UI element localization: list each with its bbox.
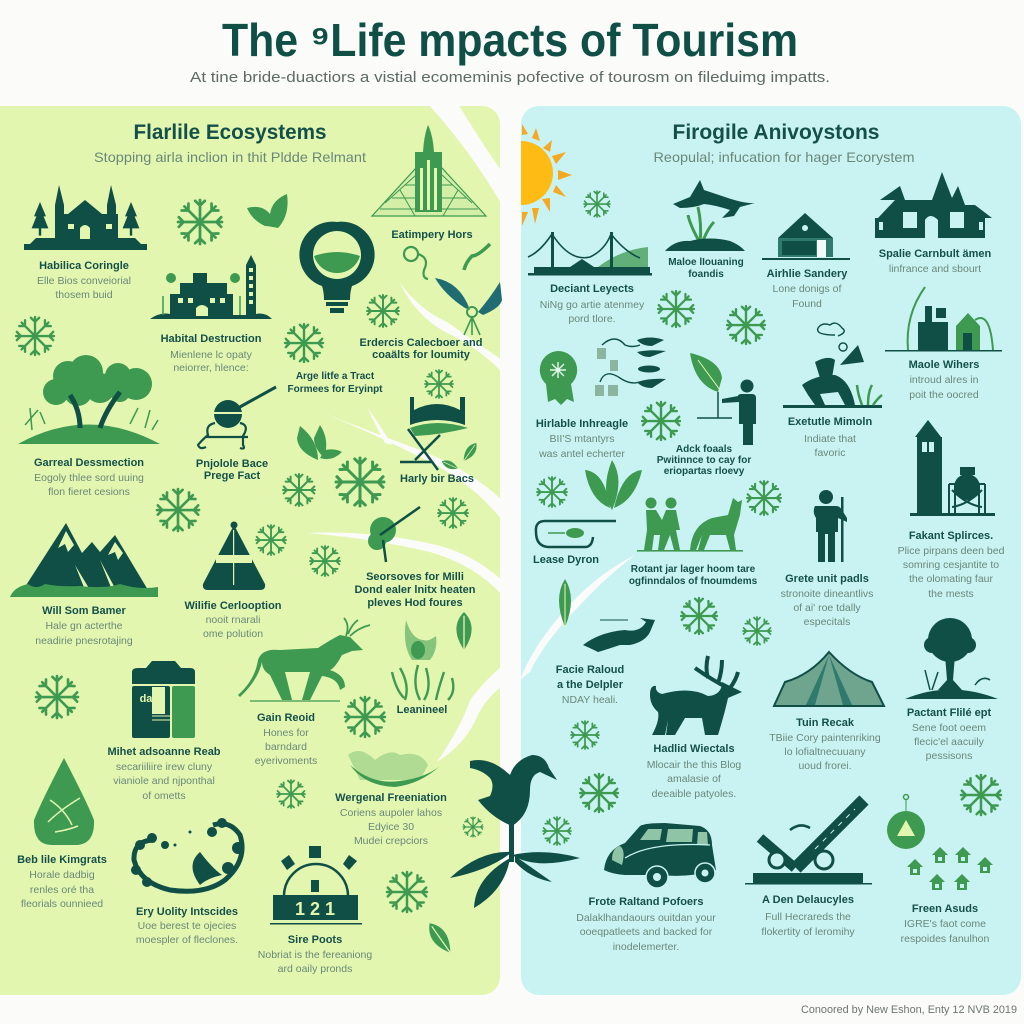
- icon: dome counter: 1 2 1: [295, 899, 335, 919]
- item: horse: [238, 618, 370, 767]
- item: tree: [18, 355, 160, 498]
- icon: tent: [774, 652, 884, 706]
- text: swirl: Ery Uolity Intscides: [136, 906, 238, 918]
- text: suitcase: Mihet adsoanne Reab: [107, 746, 221, 758]
- text: medal: BII'S mtantyrs: [549, 433, 615, 445]
- item: plant house: [885, 287, 1002, 401]
- item: ornament with houses: [887, 794, 993, 945]
- item: winged creature: [360, 278, 502, 361]
- icon: whale: [583, 618, 655, 652]
- text: person: Grete unit padls: [785, 573, 869, 585]
- item: barbecue: [196, 387, 276, 482]
- text: bulb caption: Arge litfe a Tract: [296, 371, 375, 382]
- icon: leaf bottom: [424, 919, 456, 957]
- text: bridge: pord tlore.: [568, 313, 616, 325]
- item: water drop: [17, 758, 107, 910]
- text: tower: the olomating faur: [909, 573, 994, 585]
- snowflakes left: [16, 200, 483, 912]
- text: plant twig: pleves Hod foures: [367, 597, 463, 609]
- text: medal: Hirlable Inhreagle: [536, 418, 628, 430]
- text: swirl: moespler of fleclones.: [136, 934, 238, 946]
- item: cable: [533, 521, 616, 566]
- text: car: Dalaklhandaours ouitdan your: [576, 912, 716, 924]
- icon: wetland boat: [348, 751, 440, 787]
- text: ornament: Freen Asuds: [912, 903, 978, 915]
- icon: person and leaf: [690, 353, 756, 445]
- icon: suitcase: [132, 661, 195, 738]
- text: horse: eyerivoments: [255, 755, 317, 767]
- text: barbecue: Prege Fact: [204, 470, 260, 482]
- icon: moose: [650, 656, 742, 735]
- text: whale: NDAY heali.: [562, 694, 618, 706]
- icon: cannon: [745, 800, 872, 884]
- item: mountains: [10, 523, 158, 647]
- item: dome sign: [258, 846, 372, 975]
- text: tree: Garreal Dessmection: [34, 457, 144, 469]
- text: tree: Eogoly thlee sord uuing: [34, 472, 144, 484]
- text: wetland: Mudei crepciors: [354, 835, 428, 847]
- title: The ⁹Life mpacts of Tourism: [222, 14, 798, 66]
- icon: cable: [536, 521, 616, 547]
- text: cannon bike: A Den Delaucyles: [762, 894, 854, 906]
- text: small house: Found: [792, 298, 822, 310]
- text: mountains: Hale gn acterthe: [45, 620, 123, 632]
- text: person with leaf: Adck foaals: [676, 444, 733, 455]
- text: tent: lo lofialtnecuuany: [784, 746, 866, 758]
- text: rider: favoric: [815, 447, 845, 459]
- text: horse: barndard: [265, 741, 307, 753]
- icon: sun: [521, 124, 572, 226]
- panel: left ecosystems: [0, 104, 502, 995]
- icon: bridge emblem: [400, 397, 480, 472]
- item: triangle sign: [184, 522, 282, 640]
- text: rider: Indiate that: [804, 433, 856, 445]
- text: whale: Facie Raloud: [556, 664, 624, 676]
- item: mansion: [868, 172, 992, 275]
- text: person: stronoite dineantlivs: [781, 588, 873, 600]
- text: dome sign: Sire Poots: [288, 934, 342, 946]
- text: tent: TBiie Cory paintenriking: [769, 732, 881, 744]
- icon: horse: [238, 618, 370, 701]
- text: moose: amalasie of: [667, 773, 721, 785]
- text: mountains: neadirie pnesrotajing: [35, 635, 133, 647]
- text: triangle: ome polution: [203, 628, 263, 640]
- text: mansion: linfrance and sbourt: [889, 263, 981, 275]
- text: person: especitals: [804, 616, 850, 628]
- white branch right: [520, 555, 635, 680]
- item: bulb: [287, 222, 383, 395]
- icon: person: [814, 490, 847, 562]
- text: dome sign: Nobriat is the fereaniong: [258, 949, 372, 961]
- icon: sprout plant: [392, 620, 453, 700]
- icon: central heron with leaves: [450, 755, 580, 908]
- item: rider: [783, 323, 882, 459]
- item: suspension bridge: [528, 232, 652, 325]
- text: tent: uoud frorei.: [798, 760, 852, 772]
- text: tower: somring cesjantite to: [903, 559, 999, 571]
- panel heading: Firogile Anivoystons: [672, 121, 880, 144]
- text: plant house: poit the oocred: [909, 389, 979, 401]
- text: water drop: fleorials ounnieed: [21, 898, 103, 910]
- text: tree: flon fieret cesions: [48, 486, 130, 498]
- text: triangle: nooit rnarali: [206, 614, 260, 626]
- text: cable: Lease Dyron: [533, 554, 599, 566]
- icon: greenhouse: [372, 125, 486, 216]
- text: wetland: Coriens aupoler lahos: [340, 807, 442, 819]
- text: cannon bike: Full Hecrareds the: [765, 911, 851, 923]
- text: plant house: introud alres in: [910, 374, 979, 386]
- text: car: inodelemerter.: [613, 941, 679, 953]
- text: plant sprout: Leanineel: [397, 704, 447, 716]
- text: tower: the mests: [928, 588, 974, 600]
- text: plant twig: Dond ealer lnitx heaten: [354, 584, 476, 596]
- text: church: thosem buid: [55, 289, 113, 301]
- text: small house: Airhlie Sandery: [767, 268, 848, 280]
- text: people and wolf: ogfinndalos of fnoumdems: [629, 576, 758, 587]
- icon: garden house: [885, 287, 1002, 352]
- footer credit: Conoored by New Eshon, Enty 12 NVB 2019: [801, 1004, 1017, 1016]
- text: jackrabbit: Maloe lIouaning: [668, 257, 744, 268]
- text: chateau: Mienlene lc opaty: [170, 349, 253, 361]
- icon: tower with mortar: [910, 420, 995, 516]
- item: cannon bike: [745, 800, 872, 938]
- icon: small leaf: [559, 579, 571, 627]
- panel heading: Flarlile Ecosystems: [134, 121, 326, 144]
- item: swirl wreath: [131, 818, 244, 946]
- text: winged creature: Erdercis Calecboer and: [360, 337, 482, 349]
- item: whale: [556, 618, 655, 706]
- item: chateau: [150, 255, 272, 374]
- item: plant twig: [354, 507, 476, 609]
- text: moose: deeaible patyoles.: [652, 788, 736, 800]
- text: jackrabbit: foandis: [688, 269, 724, 280]
- text: bulb caption: Formees for Eryinpt: [287, 384, 383, 395]
- text: barbecue: Pnjolole Bace: [196, 458, 268, 470]
- icon: suitcase: da: [140, 693, 153, 705]
- panel subheading: Reopulal; infucation for hager Ecorystem: [654, 149, 914, 165]
- snowflakes right: [537, 191, 1001, 845]
- text: swirl: Uoe berest te ojecies: [138, 920, 236, 932]
- text: car: ooeqpatleets and backed for: [580, 926, 713, 938]
- text: cannon bike: flokertity of leromihy: [761, 926, 855, 938]
- white river branches: [307, 104, 502, 762]
- icon: lizards: [404, 244, 490, 279]
- text: people and wolf: Rotant jar lager hoom tare: [631, 564, 756, 575]
- icon: tree on hill: [18, 355, 160, 444]
- text: bridge: NiNg go artie atenmey: [540, 299, 645, 311]
- item: person with staff: [781, 490, 873, 628]
- item: small house: [762, 213, 850, 310]
- text: tree right: flecic'el aacuily: [914, 736, 985, 748]
- icon: bridge: [528, 232, 652, 276]
- text: water drop: Horale dadbig: [29, 869, 95, 881]
- text: person with leaf: eriopartas rloevy: [664, 466, 745, 477]
- text: dome sign: ard oaily pronds: [278, 963, 352, 975]
- text: horse: Gain Reoid: [257, 712, 315, 724]
- text: church: Elle Bios conveiorial: [37, 275, 131, 287]
- text: water drop: renles oré tha: [30, 884, 94, 896]
- icon: mansion: [868, 172, 992, 238]
- text: person with leaf: Pwitinnce to cay for: [657, 455, 751, 466]
- text: tree right: pessisons: [926, 750, 972, 762]
- icon: green leaves: [297, 425, 342, 460]
- text: wetland: Wergenal Freeniation: [335, 792, 447, 804]
- icon: chateau: [150, 255, 272, 319]
- text: ornament: respoides fanulhon: [901, 933, 990, 945]
- item: church: [24, 185, 147, 301]
- text: winged creature: coaälts for loumity: [372, 349, 471, 361]
- icon: medal with hooks: [540, 338, 666, 405]
- icon: water drop: [34, 758, 94, 845]
- item: medal: [536, 338, 666, 460]
- icon: rabbit and grass: [665, 180, 755, 251]
- text: wetland: Edyice 30: [368, 821, 414, 833]
- text: water drop: Beb lile Kimgrats: [17, 854, 107, 866]
- panel subheading: Stopping airla inclion in thit Pldde Relmant: [94, 149, 366, 165]
- text: bridge: Deciant Leyects: [550, 283, 634, 295]
- panel: right ecosystems: [520, 106, 1021, 995]
- text: tree right: Pactant Flilé ept: [907, 707, 992, 719]
- text: tent: Tuin Recak: [796, 717, 855, 729]
- text: greenhouse: Eatimpery Hors: [391, 229, 473, 241]
- item: tent: [769, 652, 884, 772]
- icon: dark tree: [905, 618, 998, 699]
- item: crown bridge: [400, 397, 480, 485]
- item: person with leaf: [657, 353, 756, 477]
- icon: horse rider with cloud: [783, 323, 882, 408]
- text: suitcase: secariiliire irew cluny: [116, 761, 213, 773]
- icon: people with wolf: [637, 498, 743, 552]
- icon: twig plant: [368, 507, 420, 562]
- text: chateau: Habital Destruction: [161, 333, 262, 345]
- item: moose: [647, 656, 742, 800]
- text: suitcase: of ometts: [142, 790, 186, 802]
- icon: butterfly: [247, 194, 288, 228]
- icon: mountains: [10, 523, 158, 597]
- icon: triangle: [203, 522, 265, 590]
- text: car: Frote Raltand Pofoers: [589, 896, 703, 908]
- icon: barbecue grill: [198, 387, 276, 449]
- icon: ornament and houses: [887, 794, 993, 890]
- text: medal: was antel echerter: [538, 448, 625, 460]
- text: suitcase: vianiole and njponthal: [113, 775, 215, 787]
- text: mountains: Will Som Bamer: [42, 605, 127, 617]
- text: whale: a the Delpler: [557, 679, 624, 691]
- item: wetland: [335, 751, 447, 847]
- text: church: Habilica Coringle: [39, 260, 129, 272]
- item: tower and urn: [898, 420, 1005, 600]
- item: people and wolf: [629, 498, 758, 587]
- text: mansion: Spalie Carnbult ämen: [879, 248, 992, 260]
- text: triangle: Wilifie Cerlooption: [184, 600, 282, 612]
- icon: church: [24, 185, 147, 250]
- text: tower: Plice pirpans deen bed: [898, 545, 1005, 557]
- icon: house: [762, 213, 850, 260]
- icon: car: [604, 823, 716, 888]
- icon: leaves trio: [585, 460, 642, 510]
- text: chateau: neiorrer, hlence:: [173, 362, 249, 374]
- icon: bird with wings: [435, 278, 502, 335]
- text: moose: Hadlid Wiectals: [653, 743, 735, 755]
- item: greenhouse: [372, 125, 486, 241]
- text: horse: Hones for: [263, 727, 309, 739]
- item: plant sprout: [392, 620, 453, 716]
- text: rider: Exetutle Mimoln: [788, 416, 872, 428]
- text: plant twig: Seorsoves for Milli: [366, 571, 464, 583]
- item: tree right: [905, 618, 998, 762]
- text: ornament: IGRE's faot come: [904, 918, 986, 930]
- icon: swirl: [131, 818, 244, 891]
- text: crown bridge: Harly bir Bacs: [400, 473, 474, 485]
- icon: light bulb: [299, 222, 375, 313]
- text: person: of ai' roe tdally: [793, 602, 861, 614]
- subtitle: At tine bride-duactiors a vistial ecomeminis pofective of tourosm on fileduimg impatts.: [190, 69, 830, 86]
- item: car: [576, 823, 716, 953]
- item: suitcase: [107, 661, 221, 802]
- text: small house: Lone donigs of: [773, 283, 842, 295]
- text: tower: Fakant Splirces.: [909, 530, 993, 542]
- text: moose: Mlocair the this Blog: [647, 759, 741, 771]
- item: jackrabbit: [665, 180, 755, 280]
- text: tree right: Sene foot oeem: [912, 722, 986, 734]
- icon: leaf: [456, 612, 472, 650]
- text: plant house: Maole Wihers: [909, 359, 979, 371]
